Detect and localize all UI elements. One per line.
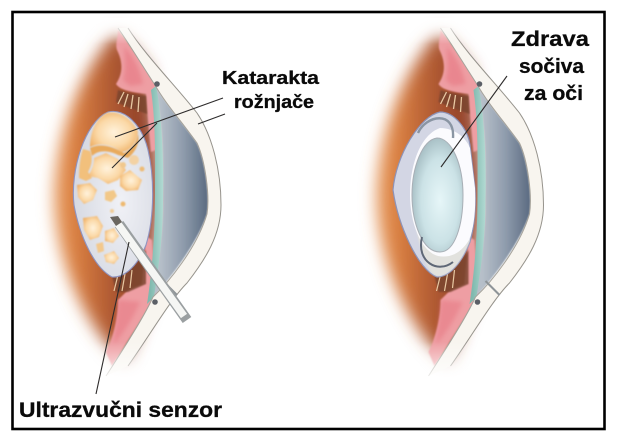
artificial lens [393,112,475,277]
label: healthy lens: Zdrava [511,28,589,51]
leader line: healthy lens [441,76,507,167]
label: ultrasound sensor: Ultrazvučni senzor [19,398,223,422]
label: cataract: rožnjače [234,91,314,112]
label: cataract: Katarakta [222,67,320,88]
ultrasound probe [110,216,187,320]
label: healthy lens [511,28,589,105]
label: cataract [222,67,320,112]
leader line: ultrasound sensor [96,242,129,394]
label: healthy lens: sočiva [519,56,585,78]
label: healthy lens: za oči [524,83,583,105]
cataract lens [73,111,153,277]
left eye: cataract illustration [40,18,230,386]
right eye: healthy lens illustration [362,18,552,386]
leader lines: cataract [112,98,225,168]
